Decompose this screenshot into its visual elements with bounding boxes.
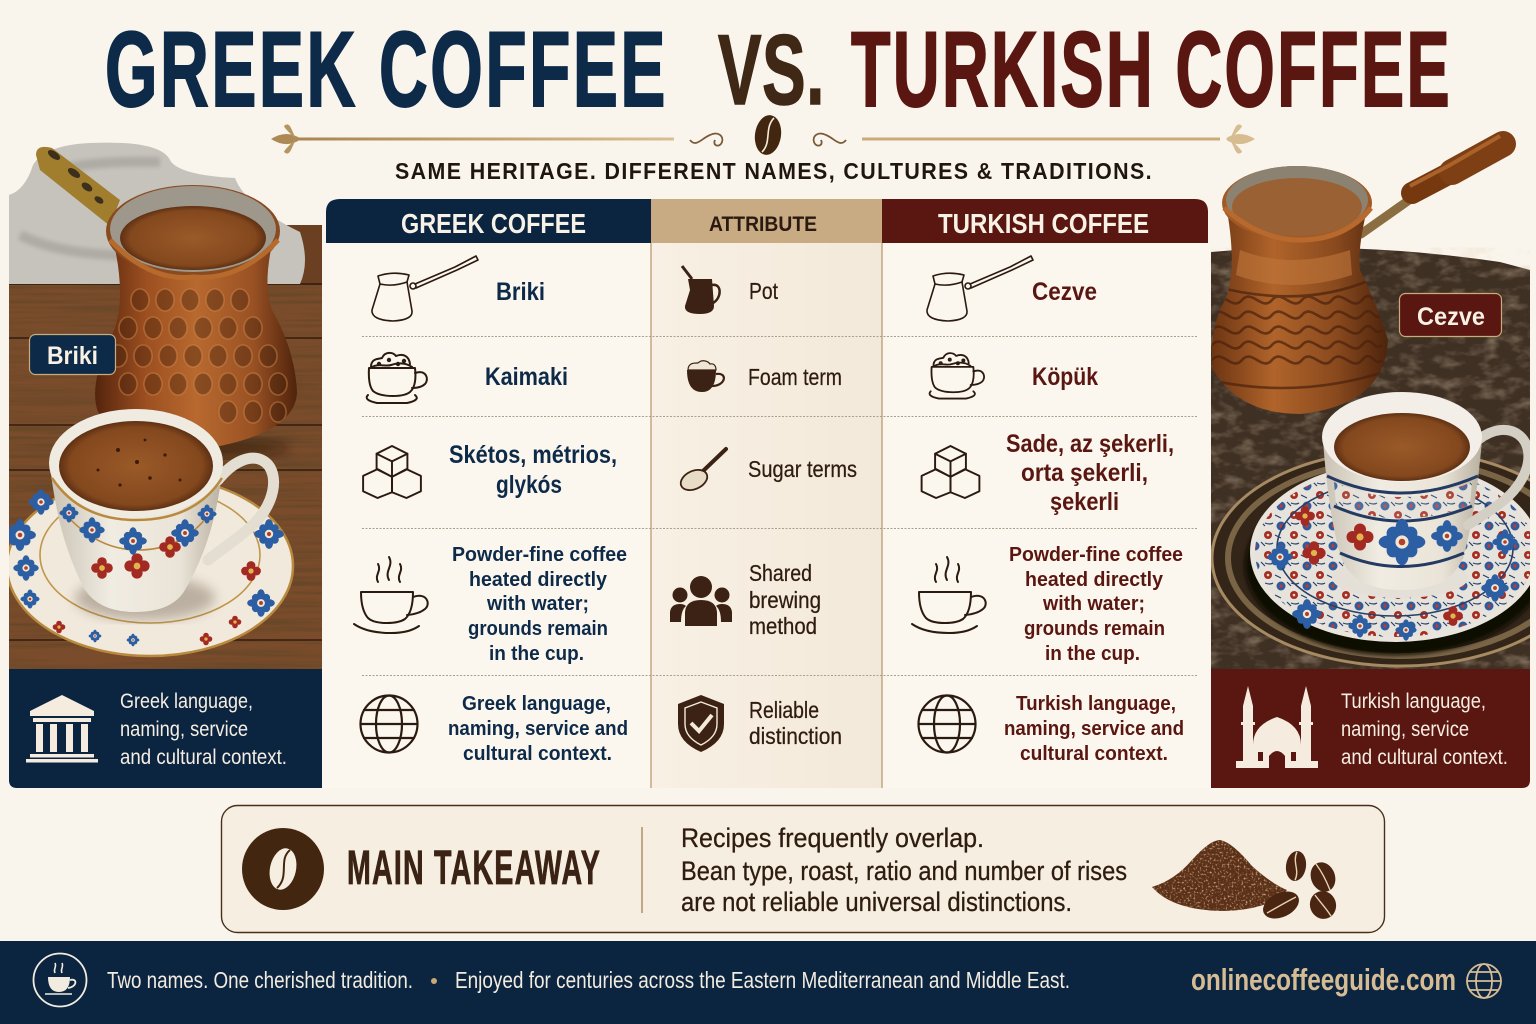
row: sugar — [363, 430, 1174, 516]
icon: Greek globe — [360, 696, 418, 752]
label: Cezve: Cezve — [1417, 303, 1485, 331]
attribute reliable distinction: Reliable — [749, 697, 819, 723]
header: Turkish coffee — [882, 199, 1208, 243]
row: context — [360, 693, 1184, 765]
Iznik saucer — [1250, 462, 1536, 642]
icon: Turkish foam cup — [930, 353, 984, 399]
panel: Greek photo — [4, 143, 322, 669]
panel: Turkish context: and cultural context. — [1341, 746, 1508, 769]
header: attribute: ATTRIBUTE — [709, 213, 817, 236]
icon: Turkish globe — [918, 696, 976, 752]
icon: people — [670, 576, 732, 626]
Greek context text: naming, service and — [448, 718, 628, 740]
Turkish brewing text — [1009, 544, 1183, 665]
panel: comparison table — [322, 199, 1210, 788]
Greek context text — [448, 693, 628, 765]
icon: pot attribute — [682, 266, 720, 314]
patterned cup — [50, 465, 223, 612]
Greek foam name: Kaimaki — [485, 363, 568, 391]
footer message: Enjoyed for centuries across the Eastern Mediterranean and Middle East. — [455, 967, 1070, 993]
panel: Greek context: and cultural context. — [120, 746, 287, 769]
Turkish sugar terms: Sade, az şekerli, — [1006, 430, 1174, 458]
engraved copper cezve — [1210, 166, 1390, 414]
Greek brewing text: Powder-fine coffee — [452, 544, 627, 566]
Turkish context text — [1004, 693, 1184, 765]
Greek sugar terms: Skétos, métrios, — [449, 441, 617, 469]
label: Briki — [30, 334, 116, 374]
Greek pot name: Briki — [496, 278, 545, 306]
Greek sugar terms: glykós — [496, 471, 562, 499]
patterned Turkish cup — [1332, 568, 1466, 598]
icon: foam attribute — [687, 361, 724, 392]
Turkish context text: naming, service and — [1004, 718, 1184, 740]
icon: bean badge — [242, 828, 324, 910]
website: onlinecoffeeguide.com — [1191, 962, 1456, 997]
panel: Greek context — [9, 669, 322, 788]
icon: Greek briki — [372, 256, 478, 321]
label: Cezve — [1400, 294, 1502, 336]
icon: Greek steaming cup — [354, 557, 428, 633]
header: attribute — [651, 199, 882, 243]
icon: Greek temple — [26, 695, 98, 762]
brass tray rings — [1212, 450, 1536, 666]
Turkish brewing text: Powder-fine coffee — [1009, 544, 1183, 566]
Turkish brewing text: grounds remain — [1024, 618, 1165, 640]
ornament divider with bean — [271, 113, 1255, 157]
towel — [9, 143, 305, 284]
title: GREEK COFFEE — [105, 9, 668, 129]
Turkish sugar terms: orta şekerli, — [1021, 459, 1148, 487]
icon: Turkish sugar cubes — [922, 446, 979, 498]
attribute foam: Foam term — [748, 364, 842, 390]
attribute pot: Pot — [749, 278, 779, 304]
icon: Greek foam cup — [367, 353, 427, 403]
panel: main takeaway — [222, 806, 1384, 932]
Greek brewing text: with water; — [486, 593, 589, 615]
icon: Turkish steaming cup — [912, 557, 986, 633]
takeaway text: Recipes frequently overlap. — [681, 823, 984, 853]
Turkish pot name: Cezve — [1032, 278, 1097, 306]
panel: Turkish context: Turkish language, — [1341, 690, 1486, 713]
attribute brewing: method — [749, 613, 817, 639]
Greek brewing text: heated directly — [469, 569, 608, 591]
icon: footer globe — [1467, 964, 1501, 998]
panel: Greek context: Greek language, — [120, 690, 253, 713]
row: foam — [367, 353, 1098, 403]
header: Greek coffee — [326, 199, 651, 243]
attribute brewing — [749, 560, 821, 639]
icon: shield — [678, 695, 724, 752]
label: Briki: Briki — [47, 342, 98, 370]
saucer — [7, 476, 293, 656]
Greek context text: Greek language, — [462, 693, 611, 715]
Turkish sugar terms — [1006, 430, 1174, 516]
panel: Turkish photo — [1210, 136, 1536, 669]
Turkish context text: cultural context. — [1020, 743, 1168, 765]
panel: Turkish context: naming, service — [1341, 718, 1469, 741]
Greek brewing text: grounds remain — [468, 618, 608, 640]
attribute sugar: Sugar terms — [748, 456, 857, 482]
icon: mosque — [1236, 686, 1318, 768]
takeaway heading: MAIN TAKEAWAY — [347, 842, 601, 895]
Greek brewing text — [452, 544, 627, 665]
row: brewing — [354, 544, 1183, 665]
Greek brewing text: in the cup. — [489, 643, 584, 665]
icon: Greek sugar cubes — [363, 446, 421, 498]
Turkish foam name: Köpük — [1032, 363, 1098, 391]
attribute brewing: brewing — [749, 587, 821, 613]
attribute reliable distinction — [749, 697, 842, 749]
title — [105, 9, 1452, 129]
title: VS. — [718, 14, 825, 125]
footer message — [107, 967, 1070, 993]
Turkish brewing text: heated directly — [1025, 569, 1164, 591]
Turkish brewing text: in the cup. — [1045, 643, 1140, 665]
attribute brewing: Shared — [749, 560, 812, 586]
takeaway text — [681, 823, 1127, 917]
subtitle: SAME HERITAGE. DIFFERENT NAMES, CULTURES & TRADITIONS. — [395, 158, 1153, 184]
footer message: Two names. One cherished tradition. — [107, 967, 413, 993]
icon: cup in circle — [34, 954, 86, 1006]
takeaway text: Bean type, roast, ratio and number of rises — [681, 856, 1127, 886]
icon: Turkish cezve — [927, 256, 1033, 321]
footer band — [0, 941, 1536, 1024]
header: Turkish coffee: TURKISH COFFEE — [938, 208, 1149, 239]
hammered copper pot — [95, 185, 297, 458]
Turkish context text: Turkish language, — [1016, 693, 1176, 715]
panel: Turkish context — [1211, 669, 1530, 788]
attribute reliable distinction: distinction — [749, 723, 842, 749]
panel: Greek context: naming, service — [120, 718, 248, 741]
icon: ground coffee and beans — [1152, 840, 1336, 919]
icon: sugar spoon — [678, 449, 726, 494]
Turkish sugar terms: şekerli — [1050, 488, 1119, 516]
Greek sugar terms — [449, 441, 617, 499]
takeaway text: are not reliable universal distinctions. — [681, 887, 1072, 917]
handle and wood grip — [1361, 198, 1412, 234]
Turkish brewing text: with water; — [1042, 593, 1145, 615]
Greek context text: cultural context. — [463, 743, 612, 765]
header: Greek coffee: GREEK COFFEE — [401, 208, 586, 239]
brass handle — [36, 147, 120, 226]
row: pot — [372, 256, 1097, 321]
